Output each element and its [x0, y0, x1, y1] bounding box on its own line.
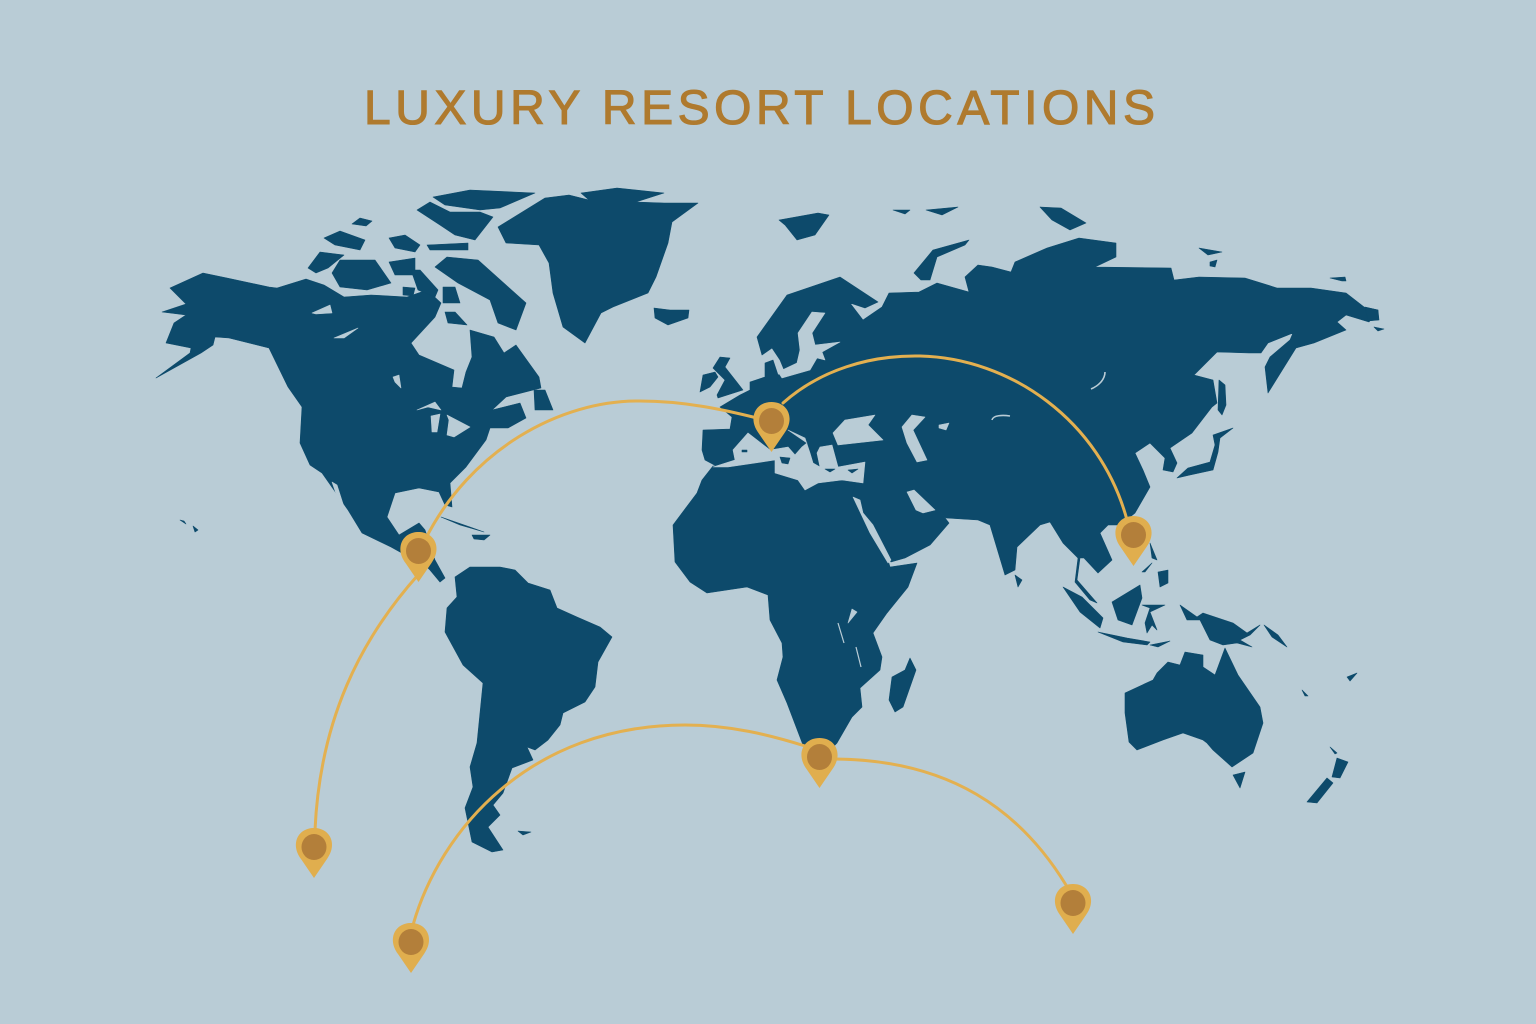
Gulf of California	[332, 482, 345, 510]
British Isles	[700, 357, 743, 398]
seas and lakes	[312, 305, 1105, 667]
Eurasia	[702, 238, 1378, 603]
Tasmania	[1233, 772, 1245, 788]
arc: Europe to Southeast Asia	[783, 356, 1127, 520]
Lake Baikal	[1091, 372, 1105, 389]
pin: South Pacific east	[393, 923, 429, 973]
Lake Tanganyika	[838, 623, 844, 643]
arc: Pacific to Central America	[315, 575, 418, 830]
Lake Winnipeg	[393, 375, 401, 388]
Red Sea	[853, 497, 891, 563]
Sri Lanka	[1015, 575, 1022, 587]
world map	[156, 188, 1384, 852]
Pacific islands	[1264, 625, 1357, 696]
South America	[445, 567, 612, 852]
Falkland Islands	[518, 831, 531, 835]
Aral Sea	[939, 423, 949, 430]
Great Bear Lake	[312, 305, 332, 314]
pin: South Pacific west	[296, 828, 332, 878]
Black Sea	[833, 415, 883, 445]
Lake Victoria	[848, 609, 857, 623]
Madagascar	[889, 658, 916, 712]
Mediterranean Sea	[713, 430, 865, 490]
Mediterranean islands	[742, 437, 858, 473]
Southeast Asia islands	[1063, 543, 1170, 647]
Africa	[673, 465, 917, 760]
Greenland	[498, 188, 698, 343]
pin: Indian Ocean	[1055, 884, 1091, 934]
arc: Central America to Europe	[425, 401, 757, 540]
route arcs	[315, 356, 1127, 925]
Lake Balkhash	[992, 415, 1010, 420]
New Guinea	[1180, 605, 1260, 647]
title: LUXURY RESORT LOCATIONS	[364, 82, 1155, 135]
pin: Southeast Asia	[1115, 516, 1152, 566]
arc: South Pacific to South Africa	[413, 725, 805, 925]
Lake Michigan	[431, 414, 440, 432]
Lake Superior	[417, 402, 441, 410]
pin: Central America	[400, 532, 437, 582]
Lake Huron	[447, 415, 470, 437]
Great Slave Lake	[334, 328, 358, 338]
Baltic Sea	[778, 312, 840, 378]
arc: South Africa to Indian Ocean	[835, 759, 1066, 885]
pin: Europe	[753, 402, 790, 452]
Japan and Sakhalin	[1177, 380, 1233, 478]
North America	[156, 190, 553, 582]
location pins	[296, 402, 1152, 973]
New Zealand	[1307, 747, 1348, 803]
pin: South Africa	[801, 738, 838, 788]
Persian Gulf	[907, 490, 935, 513]
Australia	[1125, 648, 1263, 767]
Arctic islands	[779, 207, 1384, 331]
Caspian Sea	[902, 415, 927, 462]
Iceland	[654, 308, 689, 325]
Lake Malawi	[856, 647, 861, 667]
